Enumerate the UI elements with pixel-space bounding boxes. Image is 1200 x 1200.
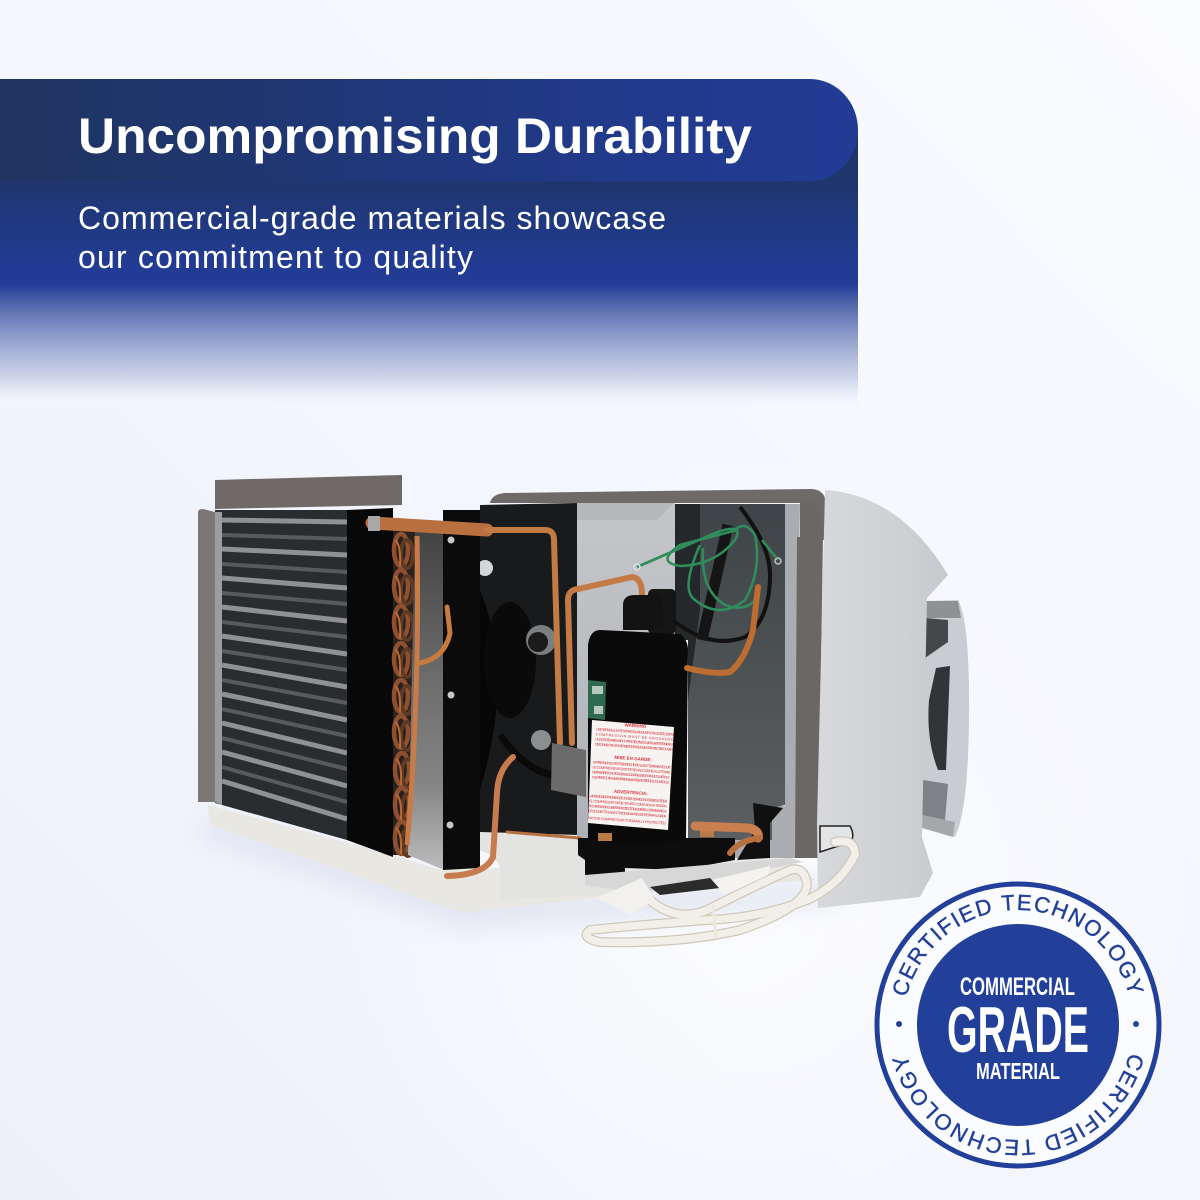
warning label: DO NOT OPERATE WITHOUT PROTECTIVE COVER OVER TERMINALS <box>595 737 674 747</box>
product: air conditioner chassis <box>195 475 969 942</box>
warning label: WARNING <box>624 722 647 729</box>
ring text bottom: CERTIFIED TECHNOLOGY <box>892 1055 1143 1156</box>
warning label: COUPER TOUTE ALIMENTATION AVANT DE RETIRER LE COUVERCLE <box>592 775 670 785</box>
handle top band <box>925 601 961 618</box>
mount bolts <box>598 829 714 841</box>
warning label: LE COMPRESSEUR DOIT ETRE RACCORDE A LA TERRE <box>592 765 671 775</box>
handle bottom band <box>922 815 955 837</box>
warning label: DESCONECTE LA ELECTRICIDAD ANTES DE RETIRAR LA TAPA <box>588 809 667 819</box>
lower handle opening <box>922 780 948 820</box>
black bracket <box>443 510 480 870</box>
coil foam top <box>215 475 402 509</box>
return tube <box>407 536 418 845</box>
badge label grade: GRADE <box>947 993 1089 1066</box>
foam frame <box>795 502 823 858</box>
compressor <box>578 589 735 875</box>
cord notch <box>820 826 853 852</box>
rear foam and top <box>490 489 826 540</box>
fan and motor <box>477 560 556 790</box>
badge disc <box>877 884 1159 1166</box>
rear panel <box>480 503 578 835</box>
dark panel shadow edge <box>675 504 700 700</box>
badge label material: MATERIAL <box>976 1058 1060 1084</box>
silver centre panel <box>577 503 675 840</box>
banner body with fade <box>0 130 858 405</box>
mounting base <box>578 838 735 875</box>
fin face <box>215 510 347 840</box>
warning label: LA PRESION DE PRUEBA DE FUGA DEL SERVICIO NO DEBE EXCEDER <box>589 794 668 804</box>
tray floor <box>480 832 790 900</box>
badge centre <box>917 924 1119 1126</box>
top cap <box>623 595 663 630</box>
handle <box>922 600 969 837</box>
warning label <box>588 720 675 830</box>
warning label: NO OPERAR SIN CUBIERTA PROTECTORA SOBRE LOS TERMINALES <box>589 804 667 814</box>
black side panel <box>347 508 393 857</box>
ring text top: CERTIFIED TECHNOLOGY <box>893 894 1144 995</box>
upper copper tube <box>687 587 758 673</box>
header banner <box>0 79 858 405</box>
ring dots <box>896 1021 1139 1027</box>
copper bends <box>393 528 417 856</box>
warning label: USE SERVICE LOW TEST PRESSURE MUST NOT EXCEED 150 PSI <box>596 727 674 737</box>
base tray <box>208 805 815 912</box>
cord tags <box>596 866 770 915</box>
tray lip <box>585 858 803 893</box>
warning label: ADVERTENCIA: <box>614 789 648 796</box>
gap under lip <box>650 878 720 895</box>
subtitle <box>78 200 666 275</box>
centre handle opening <box>928 666 950 770</box>
wires <box>634 507 781 641</box>
silver plate <box>408 532 444 870</box>
subtitle: our commitment to quality <box>78 239 473 275</box>
heading strip <box>0 79 858 181</box>
warning label: MISE EN GARDE: <box>614 755 653 762</box>
body <box>588 630 688 845</box>
warning label: MOTOR COMPRESSOR THERMALLY PROTECTED <box>588 816 666 825</box>
louvres <box>222 520 347 819</box>
warning label: NE PAS FAIRE FONCTIONNER LE COMPRESSEUR SANS COUVERCLE <box>592 770 671 780</box>
copper tubes <box>368 516 642 876</box>
front panel <box>817 490 948 908</box>
power cord <box>587 841 855 942</box>
dark right panel <box>675 504 785 840</box>
green plate <box>588 680 606 720</box>
fin frame edge <box>215 512 222 805</box>
top handle opening <box>925 618 948 658</box>
silver right strip <box>730 504 800 858</box>
badge label commercial: COMMERCIAL <box>960 973 1075 1001</box>
rear cap <box>648 589 676 634</box>
floor shadow <box>195 815 840 930</box>
top silver band <box>577 503 674 520</box>
lower copper lines <box>695 826 760 853</box>
condenser coil <box>198 475 444 870</box>
black wedge <box>737 803 783 860</box>
badge: certified technology <box>874 882 1162 1168</box>
warning label: EL COMPRESOR DEBE TENER CONEXION A TIERRA <box>589 799 668 809</box>
handle body <box>922 600 969 837</box>
title: Uncompromising Durability <box>78 108 752 164</box>
grey tape <box>551 743 586 797</box>
subtitle: Commercial-grade materials showcase <box>78 200 666 236</box>
warning label: DISCONNECT ALL POWER BEFORE REMOVING PROTECTIVE COVER <box>595 742 673 752</box>
coil foam side <box>198 509 215 802</box>
warning label: COMPRESSOR MUST BE GROUNDED <box>596 732 674 742</box>
warning label: LA PRESSION DU TEST D'ETANCHEITE SUR LE TERRAIN NE DOIT <box>593 760 672 770</box>
